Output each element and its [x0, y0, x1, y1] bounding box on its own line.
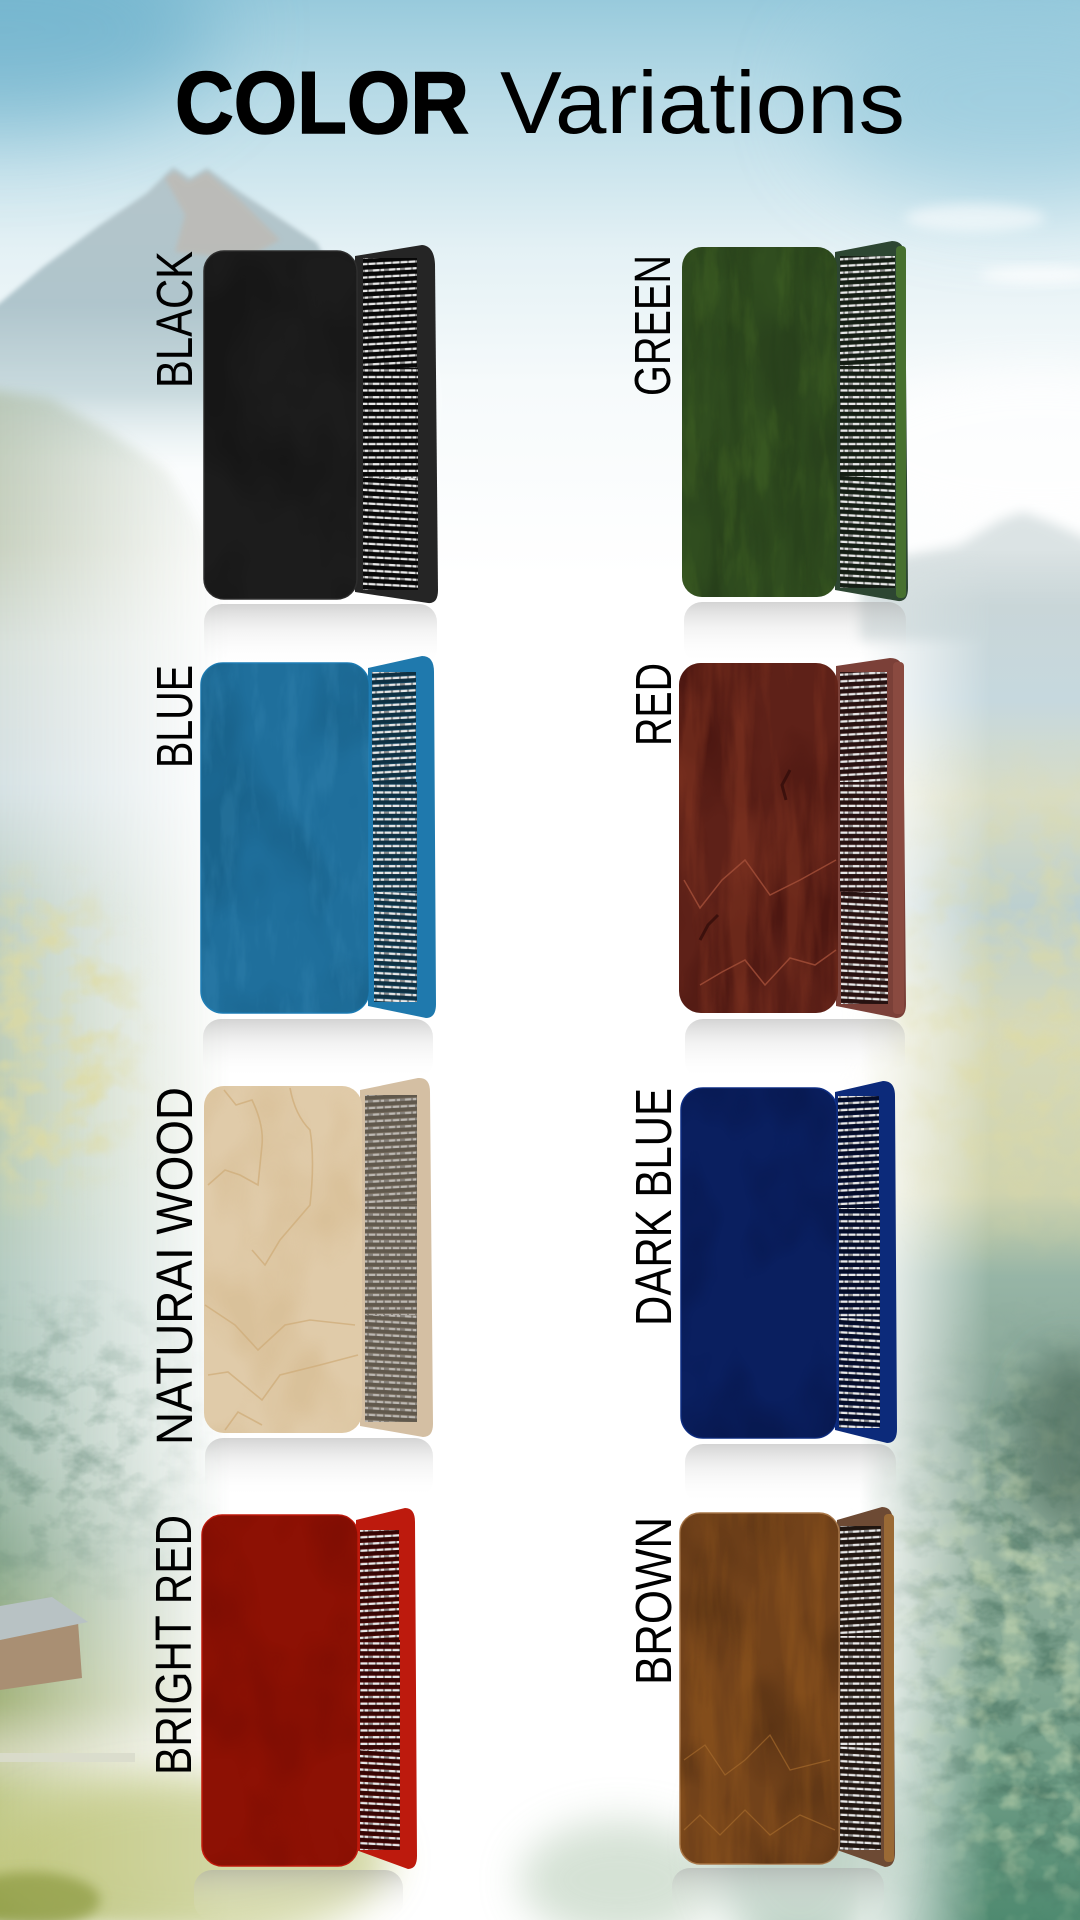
open lid with pins [355, 245, 438, 603]
open lid with pins [360, 1078, 433, 1437]
panel: brown board [625, 1507, 895, 1920]
label: DARK BLUE: DARK BLUE [625, 1088, 682, 1326]
label: BROWN: BROWN [625, 1517, 682, 1685]
dark tree shadow [1020, 1350, 1080, 1530]
distant right mountain [860, 512, 1080, 640]
board face [679, 663, 838, 1013]
panel: green board [624, 241, 908, 664]
reflection [685, 1444, 896, 1504]
label: RED: RED [625, 663, 682, 746]
panel: blue board [146, 656, 436, 1079]
board face [204, 1086, 362, 1433]
panel: dark blue board [625, 1081, 897, 1504]
open lid with pins [368, 656, 436, 1018]
reflection [684, 602, 906, 664]
foliage texture [0, 868, 141, 1206]
label: BRIGHT RED: BRIGHT RED [145, 1515, 202, 1775]
reflection [205, 1438, 433, 1498]
reflection [685, 1019, 905, 1079]
title [175, 53, 905, 152]
mountain peak [0, 167, 360, 470]
label: GREEN: GREEN [624, 255, 681, 396]
board face [201, 663, 369, 1013]
board face [204, 251, 357, 599]
open lid with pins [835, 1081, 897, 1443]
house [0, 1597, 88, 1690]
reflection [194, 1870, 403, 1920]
label: BLACK: BLACK [146, 251, 203, 388]
reflection [203, 1019, 433, 1079]
reflection [672, 1868, 884, 1920]
open lid with pins [837, 1507, 895, 1867]
left forest slope [0, 386, 210, 1920]
label: NATURAI WOOD: NATURAI WOOD [146, 1087, 203, 1445]
title: Variations [500, 53, 905, 152]
title: COLOR [175, 53, 469, 152]
board face [681, 1088, 837, 1438]
open lid with pins [836, 658, 906, 1018]
valley field [0, 1780, 390, 1920]
label: BLUE: BLUE [146, 665, 203, 768]
board face [680, 1513, 839, 1864]
panel: bright red board [145, 1508, 417, 1920]
road [0, 1753, 135, 1762]
board face [202, 1515, 358, 1866]
panel: black board [146, 245, 438, 666]
panel: natural wood board [146, 1078, 433, 1498]
open lid with pins [356, 1508, 417, 1869]
right forest slope [850, 550, 1080, 1920]
reflection [204, 604, 437, 666]
board face [682, 247, 837, 597]
panel: red board [625, 658, 906, 1079]
open lid with pins [835, 241, 908, 601]
